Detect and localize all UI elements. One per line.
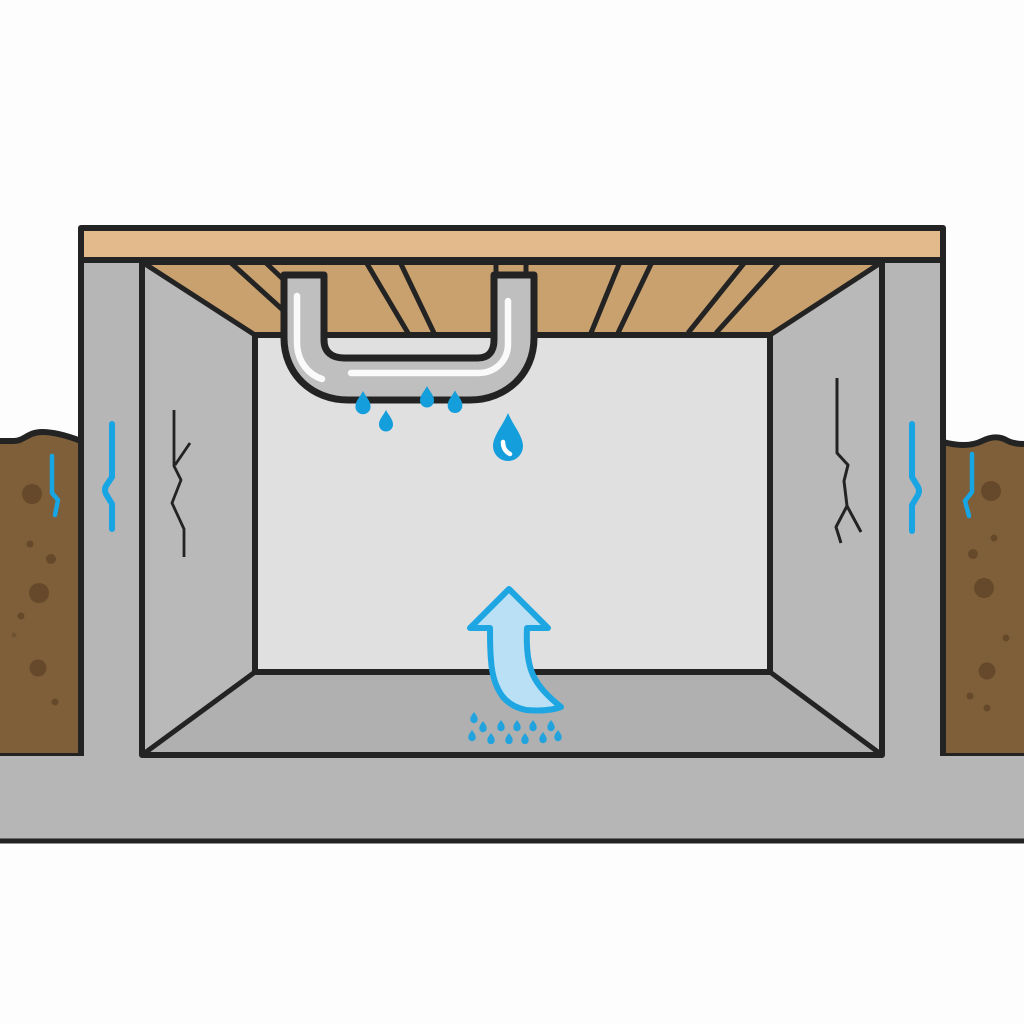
soil: left: [0, 432, 81, 756]
leak drips: [355, 386, 462, 432]
floor moisture droplets: [468, 712, 562, 744]
large water drop: [493, 413, 523, 461]
pipe highlights: [297, 296, 508, 379]
floor: [142, 672, 882, 755]
wall crack: right: [836, 378, 861, 543]
soil: right: [943, 437, 1024, 756]
wooden ceiling joists: [142, 262, 882, 335]
wall crack: left: [172, 410, 190, 557]
moisture rising arrow: [470, 589, 561, 711]
seepage line: left soil: [52, 456, 58, 515]
seepage line: right soil: [965, 454, 972, 516]
room outlines: [84, 260, 940, 755]
right wall interior: [770, 262, 882, 755]
leaking pipe: [284, 275, 534, 400]
concrete foundation walls and slab: [0, 228, 1024, 841]
seepage line: left foundation wall: [105, 424, 112, 529]
left wall interior: [142, 262, 255, 755]
seepage line: right foundation wall: [912, 424, 919, 531]
back wall: [255, 335, 770, 672]
wooden sill beam: [84, 231, 940, 259]
